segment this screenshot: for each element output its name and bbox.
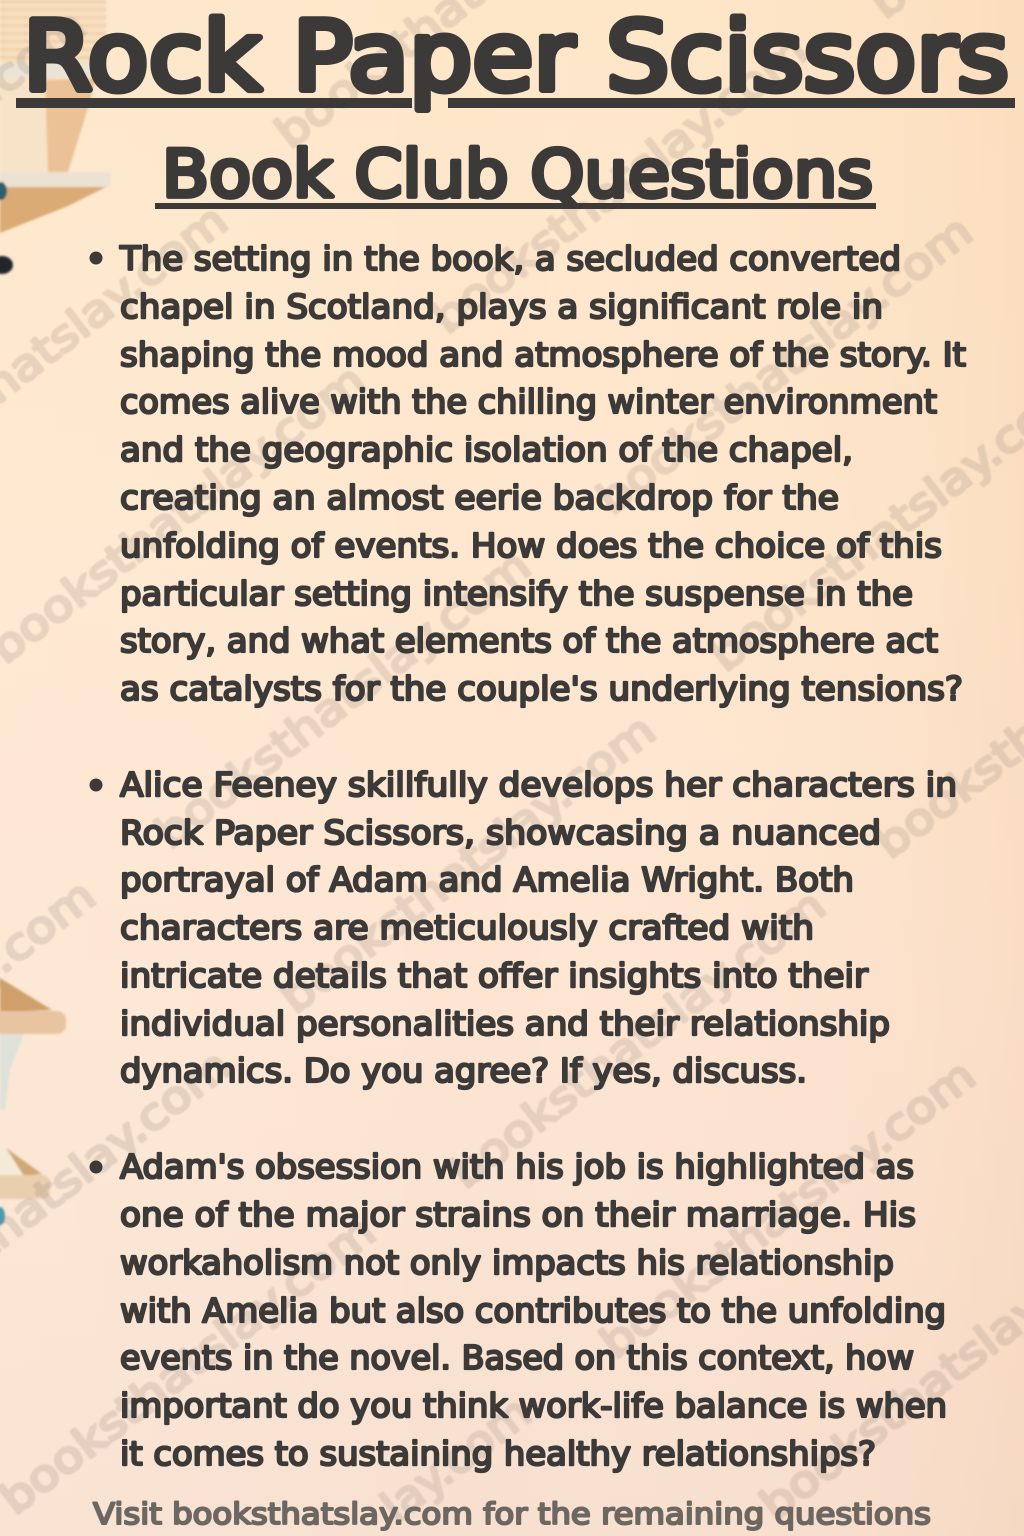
subtitle: Book Club Questions bbox=[162, 138, 873, 212]
question 2: dynamics. Do you agree? If yes, discuss. bbox=[120, 1051, 807, 1090]
watermarks: booksthatslay.com bbox=[0, 1206, 385, 1525]
question 1: unfolding of events. How does the choice of this bbox=[120, 526, 942, 565]
question 1: particular setting intensify the suspense in the bbox=[120, 574, 913, 613]
question 3 bbox=[90, 1147, 947, 1473]
question 1: chapel in Scotland, plays a significant role in bbox=[120, 287, 883, 326]
watermarks: booksthatslay.com bbox=[146, 540, 540, 859]
question 2: individual personalities and their relationship bbox=[120, 1004, 890, 1043]
question 3: important do you think work-life balance is when bbox=[120, 1386, 947, 1425]
question 3: with Amelia but also contributes to the unfolding bbox=[120, 1291, 946, 1330]
question 3: workaholism not only impacts his relationship bbox=[120, 1243, 894, 1282]
question 1: shaping the mood and atmosphere of the story. It bbox=[120, 335, 966, 374]
question 1: comes alive with the chilling winter environment bbox=[120, 382, 937, 421]
question 1: and the geographic isolation of the chapel, bbox=[120, 430, 853, 469]
question 2: characters are meticulously crafted with bbox=[120, 908, 814, 947]
watermarks: booksthatslay.com bbox=[423, 25, 817, 344]
question 3: events in the novel. Based on this context, how bbox=[120, 1338, 914, 1377]
watermarks: booksthatslay.com bbox=[441, 880, 835, 1199]
watermarks: lay.com bbox=[372, 1387, 541, 1533]
watermarks: booksthatslay.com bbox=[591, 1050, 985, 1369]
watermarks: booksthatslay.com bbox=[588, 206, 982, 525]
title: Rock Paper Scissors bbox=[23, 2, 1009, 112]
question 2: portrayal of Adam and Amelia Wright. Both bbox=[120, 860, 854, 899]
watermarks: booksthatslay.com bbox=[271, 705, 665, 1024]
question 1 bbox=[90, 239, 966, 708]
question 2: Alice Feeney skillfully develops her characters in bbox=[120, 765, 957, 804]
question 1: as catalysts for the couple's underlying tensions? bbox=[120, 669, 963, 708]
question 3: it comes to sustaining healthy relationships? bbox=[120, 1434, 876, 1473]
decoration: shelves at lower left bbox=[0, 978, 66, 1225]
question 3: Adam's obsession with his job is highlighted as bbox=[120, 1147, 914, 1186]
question 1: creating an almost eerie backdrop for the bbox=[120, 478, 839, 517]
question 2: Rock Paper Scissors, showcasing a nuanced bbox=[120, 813, 881, 852]
question 3: one of the major strains on their marriage. His bbox=[120, 1195, 916, 1234]
question 1: The setting in the book, a secluded converted bbox=[119, 239, 901, 278]
decoration: shelves at upper left bbox=[0, 0, 111, 274]
question 2 bbox=[90, 765, 957, 1090]
question 2: intricate details that offer insights into their bbox=[120, 956, 868, 995]
footer call to action: Visit booksthatslay.com for the remaining questions bbox=[93, 1497, 931, 1531]
question 1: story, and what elements of the atmosphere act bbox=[120, 621, 938, 660]
